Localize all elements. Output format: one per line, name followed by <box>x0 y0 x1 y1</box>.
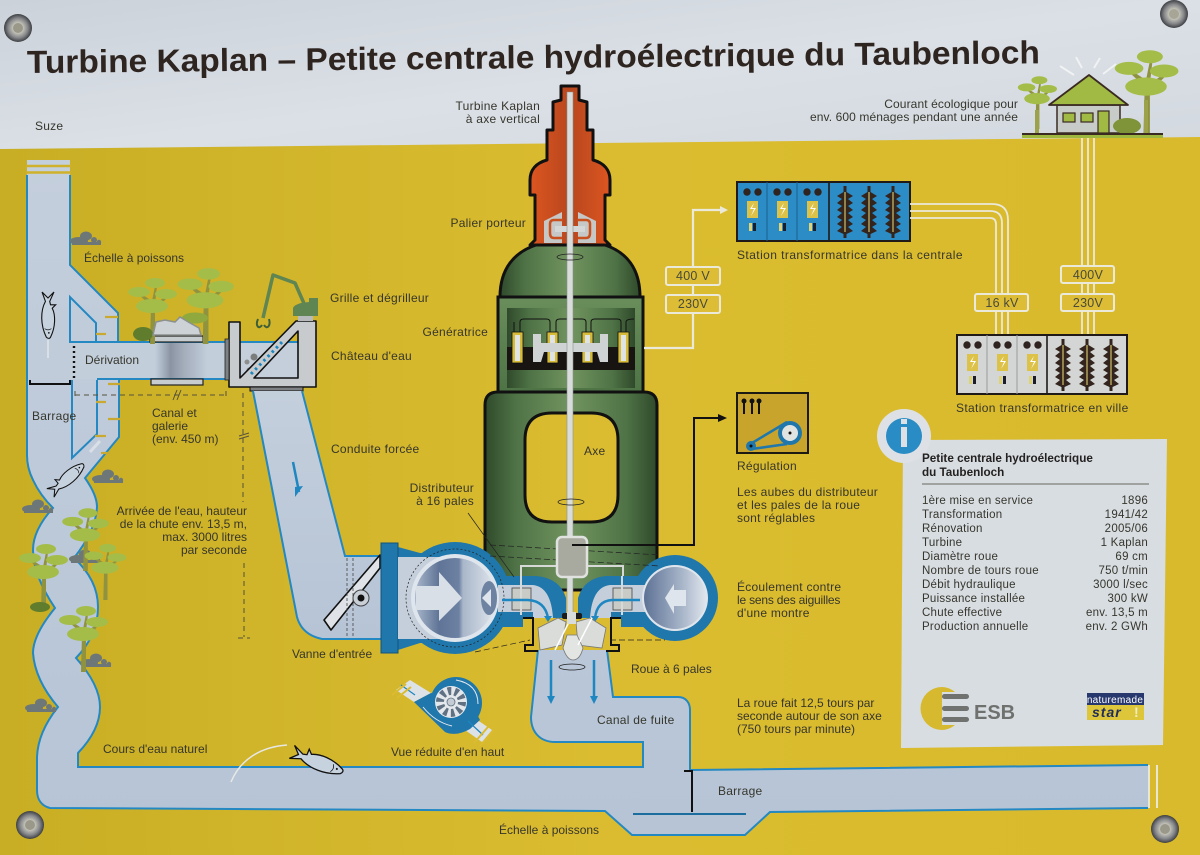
left inlet bore <box>398 557 458 639</box>
voltage tag 230 V: 230V <box>678 297 709 311</box>
measurement dashes <box>75 390 250 638</box>
facts values: 300 kW <box>1108 593 1148 605</box>
facts labels: Diamètre roue <box>922 551 998 563</box>
lower housing <box>485 392 657 590</box>
label: Dérivation: Dérivation <box>85 353 139 367</box>
left spiral body <box>399 542 511 654</box>
voltage tag city 400 V <box>1061 266 1114 283</box>
ESB logo <box>920 687 1015 730</box>
icon: regulation box <box>737 393 808 453</box>
label: Barrage river: Barrage <box>32 409 77 423</box>
facts labels: Nombre de tours roue <box>922 565 1039 577</box>
icon: water intake tower with screen <box>225 321 316 391</box>
facts labels: Puissance installée <box>922 593 1025 605</box>
left large flow arrow <box>416 572 462 621</box>
right spiral body <box>632 555 718 641</box>
penstock edges and flow arrow <box>253 391 382 639</box>
water channels <box>498 585 553 618</box>
label: ecological power: Courant écologique pour <box>884 97 1018 111</box>
label: Cours d'eau naturel: Cours d'eau naturel <box>103 742 207 756</box>
label: station in city: Station transformatrice en ville <box>956 401 1129 415</box>
shaft <box>567 92 573 620</box>
label: arrival of water: par seconde <box>181 543 247 557</box>
label: Canal de fuite: Canal de fuite <box>597 713 675 727</box>
facts values: 750 t/min <box>1098 565 1148 577</box>
facts labels: Rénovation <box>922 523 983 535</box>
transformer station in city <box>957 335 1127 394</box>
label: Conduite forcée: Conduite forcée <box>331 442 420 456</box>
icon: info <box>877 409 931 463</box>
generator chamber <box>507 308 635 388</box>
fishes and jump arc <box>42 292 346 782</box>
label: Canal et galerie: galerie <box>152 419 188 433</box>
facts labels: Chute effective <box>922 607 1002 619</box>
panel title: Petite centrale hydroélectrique <box>922 452 1093 465</box>
red thrust bearing housing <box>530 86 610 245</box>
tailrace arrows <box>547 660 598 704</box>
voltage tag city 230 V: 230V <box>1073 296 1104 310</box>
bearing <box>544 212 596 243</box>
icon: trash rake crane <box>257 275 318 327</box>
top bars <box>26 166 71 172</box>
water system: river, fish ladder and tailrace <box>26 160 1157 835</box>
label: Régulation: Régulation <box>737 459 797 473</box>
facts values: 1941/42 <box>1105 509 1148 521</box>
naturemade star label: ! <box>1134 704 1139 720</box>
label: Échelle à poissons top: Échelle à poissons <box>84 250 184 265</box>
label: Axe: Axe <box>584 444 606 458</box>
rotation marks <box>557 254 585 670</box>
text: adjustable blades: Les aubes du distributeur <box>737 485 878 499</box>
electric line from generator to transformer <box>644 206 728 348</box>
text: counterclockwise flow: d'une montre <box>737 606 810 620</box>
fish ladder steps <box>95 317 120 453</box>
facts labels: Transformation <box>922 509 1002 521</box>
voltage tag 16 kV: 16 kV <box>985 296 1019 310</box>
text: runner speed: (750 tours par minute) <box>737 722 855 736</box>
label: Roue à 6 pales: Roue à 6 pales <box>631 662 712 676</box>
facts values: 1 Kaplan <box>1101 537 1148 549</box>
barrage on river <box>30 380 70 384</box>
info panel <box>877 409 1167 748</box>
label: Palier porteur: Palier porteur <box>450 216 526 230</box>
label: Turbine Kaplan: Turbine Kaplan <box>456 99 540 113</box>
naturemade star label: star <box>1092 704 1122 720</box>
flow arrows <box>502 600 640 618</box>
right bank <box>70 175 118 342</box>
dashed hidden lines <box>475 545 665 652</box>
voltage tag 400 V <box>666 267 720 285</box>
inlet valve gate <box>324 555 380 638</box>
label: Canal et galerie: Canal et <box>152 406 197 420</box>
ESB logo: ESB <box>974 702 1015 724</box>
voltage tag 230 V <box>666 295 720 313</box>
guide vane control rods and servo box <box>521 537 623 577</box>
barrage on tailrace <box>684 770 692 812</box>
label: ecological power: env. 600 ménages pendant une année <box>810 110 1018 124</box>
facts values: 69 cm <box>1115 551 1148 563</box>
label: Turbine Kaplan: à axe vertical <box>466 112 540 126</box>
text: runner speed: seconde autour de son axe <box>737 709 882 723</box>
label: Vanne d'entrée: Vanne d'entrée <box>292 647 372 661</box>
label: Génératrice: Génératrice <box>423 325 488 339</box>
label: Distributeur: à 16 pales <box>416 494 474 508</box>
facts values: 3000 l/sec <box>1093 579 1148 591</box>
label: arrival of water: Arrivée de l'eau, hauteur <box>117 504 247 518</box>
facts values: env. 13,5 m <box>1086 607 1148 619</box>
turbine spiral casing <box>381 542 718 654</box>
title: Turbine Kaplan – Petite centrale hydroélectrique du Taubenloch <box>27 34 1040 80</box>
background upper band <box>0 0 1200 160</box>
facts labels: Turbine <box>922 537 962 549</box>
label: station in plant: Station transformatrice dans la centrale <box>737 248 963 262</box>
regulation control line <box>572 414 727 545</box>
voltage tag 400 V: 400 V <box>676 269 710 283</box>
runner with 6 blades <box>538 612 606 660</box>
river banks <box>27 175 1148 835</box>
panel title: du Taubenloch <box>922 466 1004 479</box>
lower fish ladder bank <box>72 380 1148 770</box>
household lines <box>1082 138 1094 335</box>
facts labels: 1ère mise en service <box>922 495 1033 507</box>
label: arrival of water: de la chute env. 13,5 m, <box>120 517 247 531</box>
label: Échelle à poissons bottom: Échelle à poissons <box>499 822 599 837</box>
generator coils and rotor <box>512 332 629 363</box>
facts labels: Débit hydraulique <box>922 579 1016 591</box>
power house: green generator building <box>485 245 657 590</box>
river and lower channel <box>27 160 1148 835</box>
voltage tag city 230 V <box>1061 294 1114 311</box>
text: counterclockwise flow: Écoulement contre <box>737 579 841 594</box>
label: Distributeur: Distributeur <box>410 481 474 495</box>
generator casing <box>498 297 643 392</box>
naturemade star label: naturemade <box>1087 695 1143 706</box>
voltage tag 16 kV <box>975 294 1028 311</box>
stones behind the derivation <box>153 317 201 335</box>
facts labels: Production annuelle <box>922 621 1028 633</box>
naturemade star label <box>1087 693 1144 720</box>
text: runner speed: La roue fait 12,5 tours par <box>737 696 874 710</box>
text: adjustable blades: et les pales de la roue <box>737 498 860 512</box>
black lip right <box>606 618 621 651</box>
penstock <box>253 391 382 639</box>
distributor leader line <box>468 513 514 577</box>
label: Suze: Suze <box>35 119 63 133</box>
label: Château d'eau: Château d'eau <box>331 349 412 363</box>
transformer station in plant <box>737 182 910 241</box>
inlet flange <box>398 547 460 650</box>
text: adjustable blades: sont réglables <box>737 511 815 525</box>
label: Grille et dégrilleur: Grille et dégrilleur <box>330 291 429 305</box>
rocks along the river <box>22 232 123 712</box>
text: counterclockwise flow: le sens des aiguilles <box>737 593 840 607</box>
inset: reduced view from above <box>392 677 494 746</box>
label: Barrage tailrace: Barrage <box>718 784 763 798</box>
voltage tag city 400 V: 400V <box>1073 268 1104 282</box>
facts values: 1896 <box>1121 495 1148 507</box>
icon: house with green electricity <box>1018 50 1178 138</box>
trees and vegetation <box>19 268 234 672</box>
16 kV line <box>910 204 1008 335</box>
label: Vue réduite d'en haut: Vue réduite d'en haut <box>391 745 505 759</box>
right bore and arrow <box>642 565 708 631</box>
dome <box>500 245 640 297</box>
label: arrival of water: max. 3000 litres <box>162 530 247 544</box>
black lip left <box>523 618 538 651</box>
facts values: 2005/06 <box>1105 523 1148 535</box>
label: Canal et galerie: (env. 450 m) <box>152 432 218 446</box>
fish ladder bottom plate <box>633 813 746 815</box>
facts values: env. 2 GWh <box>1086 621 1148 633</box>
guide vane boxes <box>512 588 531 610</box>
derivation channel <box>70 336 230 385</box>
